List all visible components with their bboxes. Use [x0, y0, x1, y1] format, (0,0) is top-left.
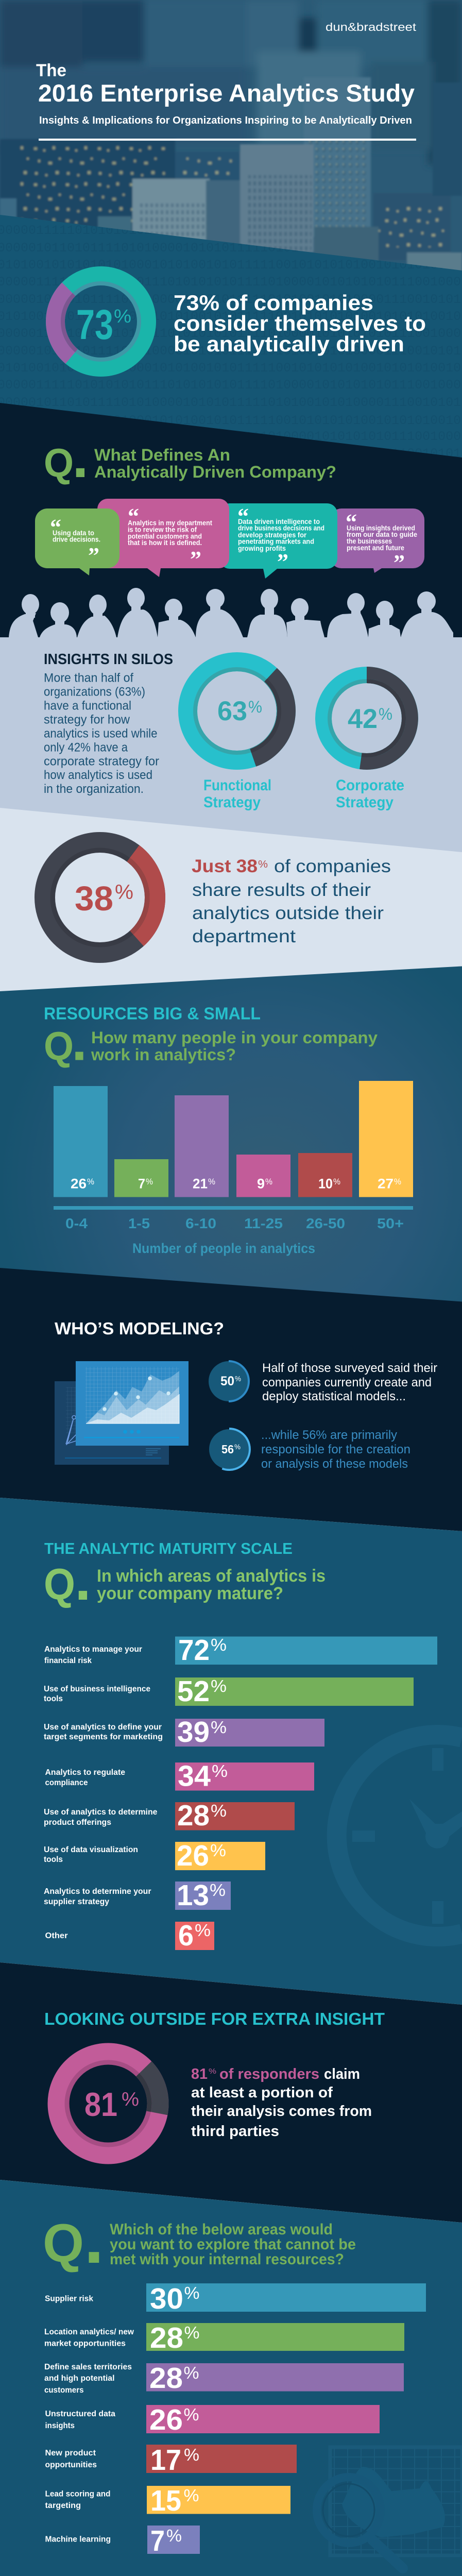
section: resources panel	[0, 967, 462, 1309]
bar: unstructured data 26 percent: Unstructured data	[45, 2410, 115, 2418]
text: half of those surveyed: deploy statistical models...	[262, 1389, 406, 1403]
stat: 50 percent circle: %	[235, 1375, 241, 1383]
binary pattern: 000001011010111101010000101010111110101001010100001110010101	[0, 241, 461, 256]
heading: what defines: What Defines An	[94, 446, 230, 464]
bar: machine learning 7 percent: 7	[150, 2524, 165, 2557]
bar chart: people in analytics: 50+	[377, 1215, 404, 1231]
speech bubble: green: Using data to	[53, 529, 94, 537]
binary pattern: 000001011010111101010000101010111110101001010100001110010101	[0, 446, 461, 461]
bar: lead scoring 15 percent: 15	[150, 2484, 181, 2517]
text: 81 percent responders	[191, 2066, 372, 2140]
text: 38 percent share results: %	[258, 859, 268, 870]
bar: product offerings 28 percent: Use of analytics to determine	[44, 1808, 158, 1817]
question: areas mature: In which areas of analytics is	[97, 1566, 326, 1586]
donut: 81 percent: %	[122, 2089, 139, 2110]
question: areas mature: .	[75, 1547, 91, 1613]
speech bubble: teal: Data driven intelligence to	[238, 518, 320, 526]
text: 38 percent share results: analytics outside their	[192, 903, 384, 923]
bar: financial risk 72 percent: Analytics to manage your	[44, 1645, 142, 1654]
bar: supplier strategy 13 percent: %	[210, 1880, 226, 1900]
speech bubble: pink: ”	[190, 547, 201, 572]
bar chart: people in analytics: %	[87, 1177, 94, 1187]
bar chart: people in analytics: 7	[138, 1176, 145, 1192]
stat: 56 percent circle: %	[234, 1443, 241, 1451]
bar chart: people in analytics: 10	[318, 1176, 333, 1192]
binary pattern: 000001111101010101011101010101011110100001010101010111001000	[0, 275, 461, 290]
bar: business intelligence 52 percent: Use of business intelligence	[44, 1685, 150, 1693]
bar: location analytics 28 percent: Location analytics/ new	[44, 2328, 134, 2336]
section: external resources panel	[0, 2180, 462, 2576]
bar chart: people in analytics: 0-4	[65, 1215, 88, 1231]
stat: 56 percent circle	[209, 1429, 250, 1470]
text: half of those surveyed: Half of those surveyed said their	[262, 1361, 437, 1375]
text: while 56 percent: ...while 56% are primarily	[261, 1428, 397, 1442]
speech bubble: teal: penetrating markets and	[238, 538, 314, 546]
text: 38 percent share results: share results of their	[192, 880, 371, 900]
bar: supplier risk 30 percent: %	[184, 2283, 200, 2302]
question: how many people	[44, 1010, 378, 1072]
binary pattern: 000001011010111101010000101010111110101001010100001110010101	[0, 344, 461, 359]
text: 73 percent analytically driven	[174, 291, 426, 356]
bar: other 6 percent: %	[195, 1921, 211, 1940]
donut: 38 percent: 38	[75, 879, 113, 918]
donut: functional strategy 63 percent: 63	[217, 696, 247, 726]
section: dark looking outside panel	[0, 1962, 462, 2223]
text: silos paragraph: in the organization.	[44, 782, 144, 796]
binary pattern: 010100101010101010001010100101011111001010101010010101010010	[0, 413, 461, 428]
bar: location analytics 28 percent: 28	[150, 2321, 183, 2354]
bar: financial risk 72 percent: 72	[178, 1634, 210, 1667]
text: silos paragraph: only 42% have a	[44, 741, 128, 755]
speech bubble: green: ”	[88, 543, 99, 568]
text: silos paragraph: how analytics is used	[44, 768, 152, 782]
speech bubble: purple: ”	[393, 550, 405, 575]
speech bubble: green	[35, 509, 119, 575]
bar: supplier risk 30 percent	[45, 2282, 426, 2315]
donut: functional strategy 63 percent: Strategy	[203, 794, 261, 811]
bar: supplier risk 30 percent: Supplier risk	[45, 2295, 93, 2303]
donut: functional strategy 63 percent: %	[248, 698, 262, 716]
bar: product offerings 28 percent: product offerings	[44, 1818, 111, 1827]
bar: new product 17 percent: %	[184, 2445, 199, 2464]
heading: insights in silos: INSIGHTS IN SILOS	[44, 651, 173, 668]
bar chart: people in analytics: 26	[71, 1176, 87, 1192]
bar: business intelligence 52 percent: tools	[44, 1694, 63, 1703]
bar chart: people in analytics	[54, 1081, 413, 1256]
speech bubble: teal	[219, 503, 337, 579]
bar: data visualization 26 percent: 26	[177, 1839, 209, 1872]
bar: new product 17 percent: opportunities	[45, 2461, 97, 2469]
question: how many people: Q	[44, 1023, 74, 1069]
binary pattern	[102, 227, 443, 268]
binary pattern: 010100101010101010001010100101011111001010101010010101010010	[0, 258, 461, 273]
heading: what defines: Analytically Driven Company?	[94, 463, 336, 481]
section: light blue panel	[0, 637, 462, 855]
bar: supplier strategy 13 percent	[44, 1879, 231, 1912]
question: which areas to explore: .	[84, 2197, 104, 2278]
bar chart: people in analytics: 1-5	[128, 1215, 150, 1231]
binary pattern: 010100101010101010001010100101011111001010101010010101010010	[0, 309, 461, 324]
binary pattern: 000001111101010101011101010101011110100001010101010111001000	[0, 429, 461, 444]
bar: compliance 34 percent: %	[212, 1761, 228, 1781]
bar chart: people in analytics: 21	[193, 1176, 208, 1192]
icon: magnifier and map watermark	[317, 2447, 462, 2568]
text: while 56 percent: responsible for the creation	[261, 1443, 410, 1456]
question: which areas to explore: Q	[43, 2213, 84, 2274]
title: 2016 Enterprise Analytics Study	[38, 79, 415, 107]
text: silos paragraph: strategy for how	[44, 713, 130, 727]
bar: unstructured data 26 percent: insights	[45, 2421, 75, 2430]
speech bubble: teal: drive business decisions and	[238, 524, 324, 532]
bar chart: people in analytics: %	[146, 1177, 153, 1187]
section: blue band with binary pattern	[0, 215, 462, 464]
text: silos paragraph: organizations (63%)	[44, 685, 145, 699]
donut: 38 percent: %	[115, 881, 133, 904]
bar: target segments 39 percent: %	[211, 1718, 227, 1737]
bar: unstructured data 26 percent: %	[183, 2405, 199, 2424]
text: silos paragraph	[44, 671, 159, 796]
bar: unstructured data 26 percent: 26	[149, 2403, 183, 2436]
illustration: chart screens	[55, 1361, 189, 1465]
text: half of those surveyed	[262, 1361, 437, 1403]
bar: compliance 34 percent: Analytics to regulate	[45, 1768, 125, 1777]
text: 73 percent analytically driven: 73% of companies	[174, 291, 373, 315]
speech bubble: purple: present and future	[347, 544, 404, 552]
question: areas mature: Q	[44, 1560, 75, 1609]
speech bubble: pink: “	[128, 504, 139, 529]
bar: target segments 39 percent: Use of analytics to define your	[44, 1723, 162, 1732]
bar: other 6 percent: 6	[178, 1919, 194, 1952]
bar: unstructured data 26 percent	[45, 2403, 380, 2436]
stat: 56 percent circle: 56	[221, 1443, 234, 1456]
binary pattern: 010100101010101010001010100101011111001010101010010101010010	[0, 361, 461, 376]
bar: data visualization 26 percent	[44, 1839, 265, 1872]
title: Insights & Implications for Organizations Inspiring to be Analytically Driven	[39, 115, 412, 126]
bar: supplier strategy 13 percent: supplier strategy	[44, 1897, 109, 1906]
bar: supplier strategy 13 percent: Analytics to determine your	[44, 1887, 151, 1896]
section: maturity scale panel	[0, 1498, 462, 2005]
bar: target segments 39 percent: target segments for marketing	[44, 1733, 163, 1741]
speech bubble: purple: “	[346, 510, 357, 535]
bar: compliance 34 percent: 34	[178, 1760, 211, 1793]
binary pattern: 000001011010111101010000101010111110101001010100001110010101	[0, 395, 461, 410]
binary pattern: 000001111101010101011101010101011110100001010101010111001000	[0, 326, 461, 341]
speech bubble: teal: develop strategies for	[238, 531, 307, 539]
bar: supplier strategy 13 percent: 13	[177, 1879, 209, 1912]
text: 38 percent share results	[192, 856, 391, 946]
bar: target segments 39 percent: 39	[177, 1716, 210, 1749]
title	[36, 61, 416, 141]
donut: corporate strategy 42 percent: Corporate	[336, 777, 404, 794]
heading: analytic maturity scale: THE ANALYTIC MATURITY SCALE	[44, 1539, 293, 1557]
speech bubble: pink: that is how it is defined.	[128, 539, 202, 547]
heading: what defines: .	[72, 424, 89, 490]
text: while 56 percent: or analysis of these models	[261, 1457, 408, 1471]
text: silos paragraph: have a functional	[44, 699, 131, 713]
bar: business intelligence 52 percent: %	[211, 1676, 227, 1696]
donut: corporate strategy 42 percent: %	[379, 705, 392, 723]
heading: what defines	[44, 424, 336, 490]
text: silos paragraph: More than half of	[44, 671, 133, 685]
heading: looking outside: LOOKING OUTSIDE FOR EXTRA INSIGHT	[44, 2009, 385, 2028]
hero city photo background	[0, 0, 462, 278]
bar: sales territories 28 percent: %	[183, 2363, 199, 2382]
bar: lead scoring 15 percent: targeting	[45, 2501, 81, 2510]
text: 81 percent responders: 81	[191, 2066, 208, 2082]
speech bubble: pink: Analytics in my department	[128, 519, 212, 527]
bar chart: people in analytics: 27	[378, 1176, 393, 1192]
speech bubble: teal: growing profits	[238, 545, 286, 552]
speech bubble: purple: Using insights derived	[347, 524, 415, 532]
text: 38 percent share results: of companies	[274, 856, 391, 876]
title: The	[36, 61, 66, 80]
bar: data visualization 26 percent: Use of data visualization	[44, 1845, 138, 1854]
bar: compliance 34 percent	[45, 1760, 314, 1793]
question: how many people: How many people in your company	[91, 1028, 378, 1047]
text: half of those surveyed: companies currently create and	[262, 1376, 432, 1389]
bar chart: people in analytics: 26-50	[306, 1215, 345, 1231]
bar chart: external areas	[44, 2282, 426, 2557]
speech bubble: pink: potential customers and	[128, 532, 202, 540]
bar: data visualization 26 percent: tools	[44, 1855, 63, 1864]
donut: 38 percent	[45, 842, 155, 953]
speech bubble: teal: “	[237, 504, 249, 529]
bar chart: people in analytics: Number of people in analytics	[132, 1241, 315, 1256]
speech bubble: purple: from our data to guide	[347, 531, 417, 538]
bar: new product 17 percent	[45, 2444, 297, 2477]
section: pale panel	[0, 808, 462, 994]
bar: machine learning 7 percent: Machine learning	[45, 2535, 111, 2544]
bar: data visualization 26 percent: %	[210, 1841, 226, 1860]
donut: corporate strategy 42 percent: 42	[348, 704, 378, 734]
bar chart: people in analytics: %	[208, 1177, 215, 1187]
donut: 73 percent: %	[114, 306, 131, 327]
donut: functional strategy 63 percent: Functional	[203, 777, 271, 794]
bar: lead scoring 15 percent	[45, 2484, 290, 2517]
text: 73 percent analytically driven: consider themselves to	[174, 311, 426, 335]
text: silos paragraph: analytics is used while	[44, 727, 158, 741]
bar: other 6 percent: Other	[45, 1931, 68, 1940]
bar: supplier risk 30 percent: 30	[150, 2282, 183, 2315]
bar chart: maturity	[44, 1634, 437, 1952]
bar: sales territories 28 percent	[44, 2362, 404, 2395]
bar: sales territories 28 percent: customers	[44, 2386, 84, 2395]
bar: business intelligence 52 percent: 52	[177, 1675, 210, 1708]
speech bubble: pink	[97, 499, 229, 577]
bar: product offerings 28 percent: %	[211, 1801, 227, 1820]
bar: financial risk 72 percent: %	[211, 1635, 227, 1654]
bar chart: people in analytics: 9	[257, 1176, 265, 1192]
heading: who's modeling: WHO’S MODELING?	[55, 1319, 224, 1338]
speech bubble: green: drive decisions.	[53, 536, 100, 543]
icon: clock watermark	[337, 1735, 462, 1937]
speech bubble: purple: the businesses	[347, 537, 392, 545]
text: while 56 percent	[261, 1428, 410, 1471]
text: 38 percent share results: Just 38	[192, 856, 258, 876]
heading: resources big and small: RESOURCES BIG & SMALL	[44, 1004, 261, 1023]
speech bubble: green: “	[50, 515, 61, 540]
people silhouettes	[9, 588, 453, 637]
bar: lead scoring 15 percent: %	[183, 2486, 199, 2505]
text: 81 percent responders: their analysis comes from	[191, 2103, 372, 2120]
question: which areas to explore: you want to explore that cannot be	[110, 2236, 356, 2253]
speech bubble: teal: ”	[277, 549, 288, 574]
heading: what defines: Q	[44, 440, 74, 485]
question: which areas to explore: met with your internal resources?	[110, 2251, 344, 2268]
bar: financial risk 72 percent	[44, 1634, 437, 1667]
donut: 73 percent: 73	[76, 301, 113, 348]
question: how many people: .	[72, 1010, 87, 1072]
bar: business intelligence 52 percent	[44, 1675, 414, 1708]
bar: lead scoring 15 percent: Lead scoring and	[45, 2489, 110, 2499]
speech bubble: purple	[330, 509, 424, 575]
bar: location analytics 28 percent: %	[184, 2323, 200, 2342]
text: 38 percent share results: department	[192, 926, 296, 946]
binary pattern: 000001111101010101011101010101011110100001010101010111001000	[0, 378, 461, 393]
donut: 81 percent	[58, 2054, 158, 2154]
question: which areas to explore	[43, 2197, 356, 2278]
binary pattern: 000001111101010101011101010101011110100001010101010111001000	[0, 223, 461, 238]
speech bubble: pink: is to review the risk of	[128, 526, 197, 534]
text: 81 percent responders: of responders	[219, 2066, 319, 2082]
bar chart: people in analytics: %	[333, 1177, 340, 1187]
bar: financial risk 72 percent: financial risk	[44, 1656, 92, 1665]
bar: sales territories 28 percent: 28	[149, 2362, 183, 2395]
donut: corporate strategy 42 percent	[323, 675, 410, 811]
bar: new product 17 percent: New product	[45, 2449, 96, 2458]
text: 81 percent responders: third parties	[191, 2123, 279, 2140]
bar chart: people in analytics: 6-10	[185, 1215, 216, 1231]
donut: 73 percent	[55, 276, 147, 367]
text: 81 percent responders: claim	[324, 2066, 360, 2082]
question: which areas to explore: Which of the below areas would	[110, 2221, 333, 2238]
bar chart: people in analytics: 11-25	[244, 1215, 283, 1231]
bar: new product 17 percent: 17	[150, 2444, 181, 2477]
text: 81 percent responders: at least a portion of	[191, 2084, 333, 2101]
section: dark question panel	[0, 403, 462, 639]
donut: 81 percent: 81	[84, 2086, 117, 2123]
bar chart: people in analytics: %	[394, 1177, 401, 1187]
stat: 50 percent circle	[209, 1361, 249, 1401]
bar: machine learning 7 percent: %	[166, 2526, 182, 2545]
bar: sales territories 28 percent: Define sales territories	[44, 2363, 132, 2371]
bar: sales territories 28 percent: and high potential	[44, 2374, 114, 2383]
bar: machine learning 7 percent	[45, 2524, 200, 2557]
donut: functional strategy 63 percent	[187, 662, 286, 811]
text: 81 percent responders: %	[209, 2067, 216, 2076]
bar: location analytics 28 percent	[44, 2321, 404, 2354]
question: areas mature: your company mature?	[97, 1584, 283, 1603]
question: how many people: work in analytics?	[91, 1045, 236, 1064]
donut: corporate strategy 42 percent: Strategy	[336, 794, 393, 811]
binary pattern: 000001011010111101010000101010111110101001010100001110010101	[0, 292, 461, 307]
stat: 50 percent circle: 50	[220, 1374, 234, 1388]
text: 73 percent analytically driven: be analytically driven	[174, 332, 404, 356]
logo: dun & bradstreet (header): dun&bradstreet	[326, 21, 416, 33]
bar: location analytics 28 percent: market opportunities	[44, 2340, 126, 2348]
bar: target segments 39 percent	[44, 1716, 324, 1749]
bar chart: people in analytics: %	[265, 1177, 272, 1187]
question: areas mature	[44, 1547, 326, 1613]
text: silos paragraph: corporate strategy for	[44, 755, 159, 769]
bar: product offerings 28 percent: 28	[177, 1799, 210, 1832]
section: dark modeling panel	[0, 1268, 462, 1531]
bar: product offerings 28 percent	[44, 1799, 295, 1832]
bar: other 6 percent	[45, 1919, 214, 1952]
bar: compliance 34 percent: compliance	[45, 1778, 88, 1787]
